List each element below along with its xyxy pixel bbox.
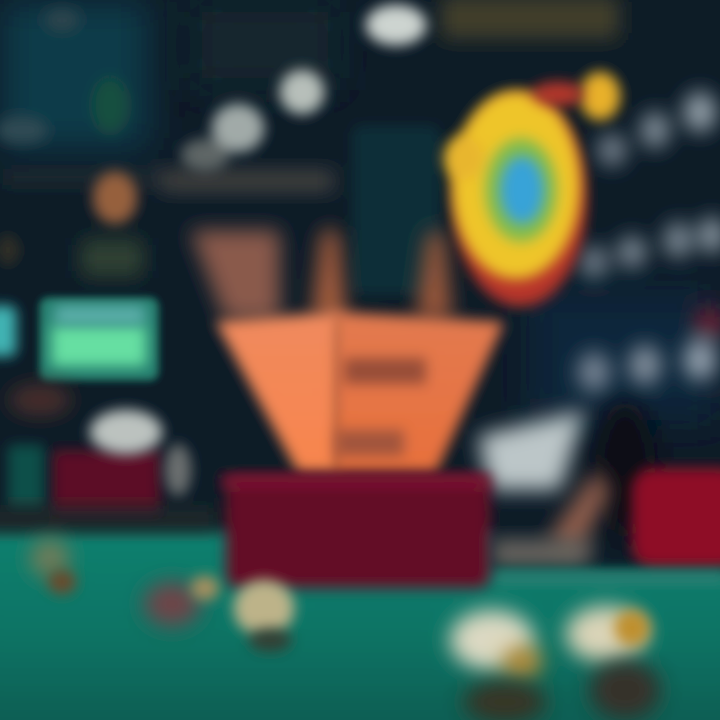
green billiard table [0, 508, 720, 720]
orange funnel [216, 312, 504, 472]
funnel blurred label bars [336, 358, 426, 456]
dark central column [352, 125, 440, 295]
green glowing screen [40, 298, 158, 380]
target circle with yellow, green and blue rings [444, 72, 620, 306]
funnel top fingers [190, 230, 452, 320]
white papers and figure at right [478, 402, 720, 568]
crimson sofa [222, 474, 490, 588]
cyan screen at left edge [0, 306, 16, 356]
billiard balls [30, 538, 661, 720]
right shelves with bottles [578, 92, 720, 392]
person silhouette left with orange head [0, 172, 144, 278]
ceiling lights and shelf highlights [0, 5, 426, 171]
lounge figures at left [8, 384, 191, 516]
